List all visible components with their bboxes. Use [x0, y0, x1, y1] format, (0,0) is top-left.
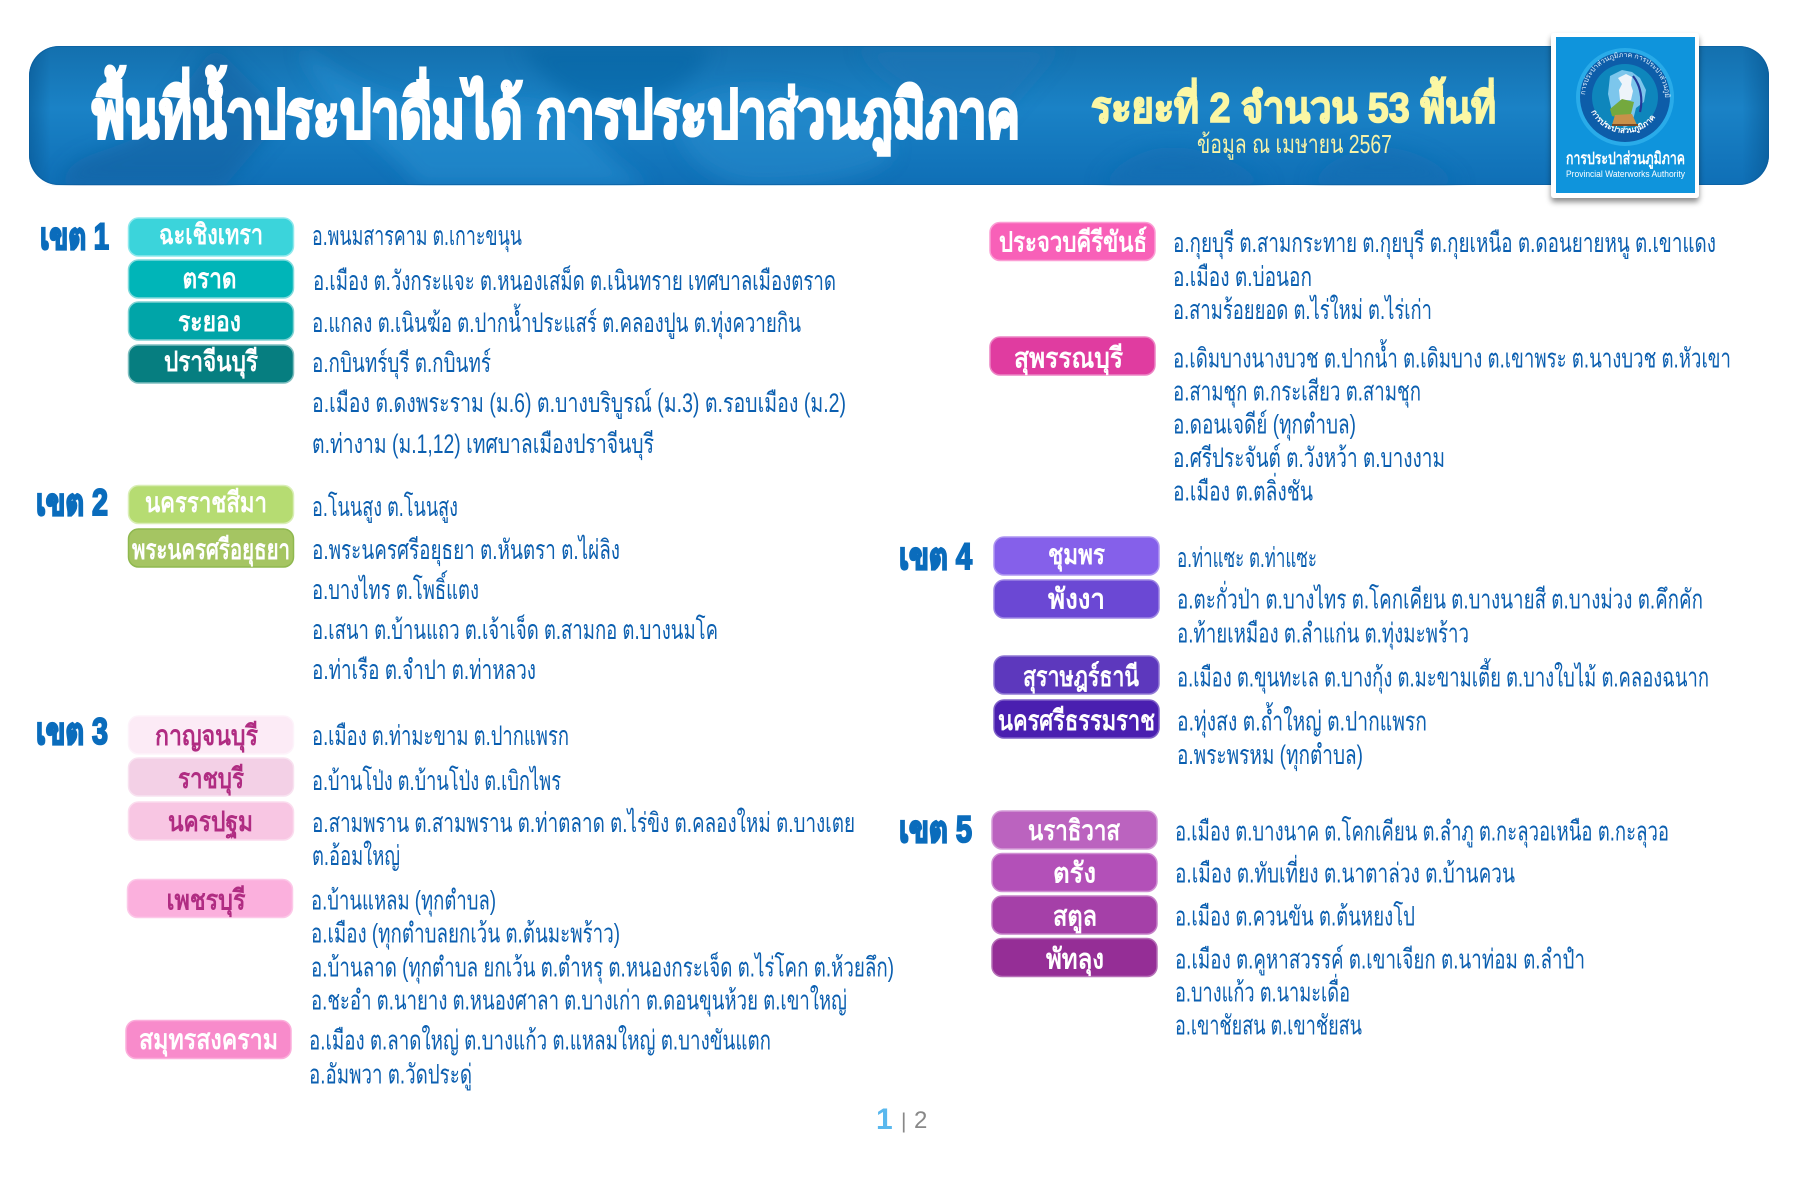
districts: Nakhon Pathom: [312, 807, 855, 871]
logo wordmark: การประปาส่วนภูมิภาค: [1566, 149, 1685, 170]
districts: Samut Songkhram: อ.เมือง ต.ลาดใหญ่ ต.บางแก้ว ต.แหลมใหญ่ ต.บางขันแตก: [309, 1024, 771, 1056]
districts: Suphan Buri: อ.ศรีประจันต์ ต.วังหว้า ต.บางงาม: [1173, 442, 1445, 473]
page number: 2: [914, 1107, 927, 1134]
province: Phatthalung: [992, 938, 1157, 976]
province: Phang Nga: [994, 580, 1159, 618]
province: Chumphon: [994, 537, 1159, 575]
province: Phetchaburi: [128, 880, 292, 918]
districts: Phetchaburi: [311, 886, 894, 1018]
districts: Phatthalung: อ.บางแก้ว ต.นามะเดื่อ: [1175, 974, 1350, 1008]
districts: Nakhon Pathom: อ.สามพราน ต.สามพราน ต.ท่าตลาด ต.ไร่ขิง ต.คลองใหม่ ต.บางเตย: [312, 807, 855, 838]
province: Phang Nga: พังงา: [1048, 584, 1105, 614]
districts: Phetchaburi: อ.เมือง (ทุกตำบลยกเว้น ต.ต้นมะพร้าว): [311, 918, 620, 950]
districts: Phatthalung: อ.เขาชัยสน ต.เขาชัยสน: [1175, 1010, 1362, 1040]
logo ring lettering: การประปาส่วนภูมิภาค: [1591, 110, 1656, 134]
heading: zone 2: เขต 2: [36, 482, 108, 523]
province: Samut Songkhram: [126, 1020, 291, 1058]
province: Chachoengsao: [128, 218, 294, 256]
districts: Phetchaburi: อ.บ้านแหลม (ทุกตำบล): [311, 886, 496, 918]
province: Ratchaburi: [128, 758, 294, 796]
districts: Suphan Buri: [1173, 338, 1731, 506]
districts: Prachinburi: [312, 347, 846, 461]
districts: Phatthalung: อ.เมือง ต.คูหาสวรรค์ ต.เขาเจียก ต.นาท่อม ต.ลำปำ: [1175, 944, 1585, 976]
panel: zone 2: [36, 482, 718, 685]
province: Satun: สตูล: [1053, 900, 1097, 934]
logo figure: [1608, 70, 1646, 128]
province: Nakhon Pathom: นครปฐม: [168, 806, 253, 840]
districts: Prachuap Khiri Khan: อ.สามร้อยยอด ต.ไร่ใหม่ ต.ไร่เก่า: [1173, 294, 1432, 325]
districts: Prachuap Khiri Khan: อ.เมือง ต.บ่อนอก: [1173, 262, 1312, 292]
panel: zone 5: [899, 809, 1669, 1040]
province: Satun: [992, 896, 1157, 934]
districts: Samut Songkhram: [309, 1024, 771, 1090]
districts: Ayutthaya: อ.พระนครศรีอยุธยา ต.หันตรา ต.ไผ่ลิง: [312, 535, 620, 567]
district: Kanchanaburi: อ.เมือง ต.ท่ามะขาม ต.ปากแพรก: [312, 721, 569, 751]
districts: Phang Nga: [1177, 580, 1703, 650]
districts: Ayutthaya: [312, 535, 718, 685]
district: Trang: อ.เมือง ต.ทับเที่ยง ต.นาตาล่วง ต.บ้านควน: [1175, 854, 1515, 888]
district: Satun: อ.เมือง ต.ควนขัน ต.ต้นหยงโป: [1175, 902, 1415, 932]
province: Prachinburi: [128, 345, 294, 383]
districts: Ayutthaya: อ.ท่าเรือ ต.จำปา ต.ท่าหลวง: [312, 655, 536, 685]
districts: Samut Songkhram: อ.อัมพวา ต.วัดประดู่: [309, 1060, 472, 1090]
panel: zone 4: [899, 536, 1709, 772]
district: Chumphon: อ.ท่าแซะ ต.ท่าแซะ: [1177, 543, 1317, 573]
districts: Phetchaburi: อ.ชะอำ ต.นายาง ต.หนองศาลา ต.บางเก่า ต.ดอนขุนห้วย ต.เขาใหญ่: [311, 984, 847, 1018]
province: Trang: ตรัง: [1053, 858, 1096, 888]
districts: Phang Nga: อ.ท้ายเหมือง ต.ลำแก่น ต.ทุ่งมะพร้าว: [1177, 618, 1469, 650]
province: Suphan Buri: [990, 337, 1155, 376]
province: Prachuap Khiri Khan: [990, 222, 1155, 260]
province: Nakhon Si Thammarat: [994, 700, 1159, 738]
panel: zone 1: [40, 216, 846, 461]
districts: Phetchaburi: อ.บ้านลาด (ทุกตำบล ยกเว้น ต.ตำหรุ ต.หนองกระเจ็ด ต.ไร่โคก ต.ห้วยลึก): [311, 950, 894, 984]
province: Phetchaburi: เพชรบุรี: [166, 884, 246, 918]
province: Ayutthaya: [128, 529, 294, 567]
province: Prachinburi: ปราจีนบุรี: [164, 346, 258, 379]
districts: Suphan Buri: อ.สามชุก ต.กระเสียว ต.สามชุก: [1173, 376, 1421, 408]
province: Trat: ตราด: [182, 263, 236, 294]
province: Rayong: [128, 302, 294, 340]
panel: Prachuap and Suphan: [990, 222, 1731, 506]
province: Rayong: ระยอง: [178, 306, 241, 337]
districts: Ayutthaya: อ.เสนา ต.บ้านแถว ต.เจ้าเจ็ด ต.สามกอ ต.บางนมโค: [312, 612, 718, 645]
heading: zone 4: เขต 4: [899, 536, 972, 577]
province: Nakhon Si Thammarat: นครศรีธรรมราช: [998, 705, 1155, 736]
districts: Prachinburi: อ.เมือง ต.ดงพระราม (ม.6) ต.บางบริบูรณ์ (ม.3) ต.รอบเมือง (ม.2): [312, 387, 846, 419]
province: Surat Thani: [994, 656, 1159, 694]
districts: Suphan Buri: อ.เมือง ต.ตลิ่งชัน: [1173, 472, 1313, 506]
province: Chachoengsao: ฉะเชิงเทรา: [159, 219, 263, 250]
province: Narathiwat: [992, 811, 1157, 849]
province: Surat Thani: สุราษฎร์ธานี: [1023, 661, 1139, 694]
panel: zone 3: [36, 711, 894, 1090]
province: Trang: [992, 854, 1157, 892]
districts: Phatthalung: [1175, 944, 1585, 1040]
subtitle: phase 2, 53 areas: ระยะที่ 2 จำนวน 53 พื้นที่: [1091, 76, 1496, 131]
page number: |: [901, 1110, 906, 1133]
districts: Nakhon Si Thammarat: [1177, 702, 1427, 772]
province: Kanchanaburi: [128, 716, 294, 754]
heading: zone 1: เขต 1: [40, 216, 109, 257]
province: Ayutthaya: พระนครศรีอยุธยา: [132, 534, 290, 567]
province: Nakhon Ratchasima: นครราชสีมา: [145, 487, 267, 518]
page number: 1: [876, 1103, 893, 1136]
province: Ratchaburi: ราชบุรี: [178, 763, 244, 796]
data date: ข้อมูล ณ เมษายน 2567: [1197, 129, 1392, 160]
province: Trat: [128, 260, 294, 298]
heading: zone 5: เขต 5: [899, 809, 972, 850]
districts: Prachuap Khiri Khan: [1173, 228, 1716, 325]
districts: Nakhon Pathom: ต.อ้อมใหญ่: [312, 840, 400, 871]
province: Nakhon Pathom: [128, 802, 294, 840]
province: Narathiwat: นราธิวาส: [1028, 815, 1121, 846]
province: Prachuap Khiri Khan: ประจวบคีรีขันธ์: [999, 226, 1147, 258]
province: Phatthalung: พัทลุง: [1046, 944, 1104, 976]
district: Rayong: อ.แกลง ต.เนินฆ้อ ต.ปากน้ำประแสร์ ต.คลองปูน ต.ทุ่งควายกิน: [312, 303, 801, 340]
districts: Suphan Buri: อ.ดอนเจดีย์ (ทุกตำบล): [1173, 408, 1356, 442]
province: Kanchanaburi: กาญจนบุรี: [155, 720, 258, 753]
page number: [876, 1103, 927, 1136]
district: Trat: อ.เมือง ต.วังกระแจะ ต.หนองเสม็ด ต.เนินทราย เทศบาลเมืองตราด: [313, 263, 836, 296]
logo card: [32, 34, 1703, 206]
districts: Ayutthaya: อ.บางไทร ต.โพธิ์แตง: [312, 570, 479, 605]
logo ring lettering: [1581, 50, 1671, 134]
title: พื้นที่น้ำประปาดื่มได้ การประปาส่วนภูมิภาค: [92, 65, 1020, 156]
districts: Nakhon Si Thammarat: อ.พระพรหม (ทุกตำบล): [1177, 740, 1363, 772]
province: Chumphon: ชุมพร: [1048, 539, 1105, 572]
districts: Nakhon Si Thammarat: อ.ทุ่งสง ต.ถ้ำใหญ่ ต.ปากแพรก: [1177, 702, 1427, 738]
district: Chachoengsao: อ.พนมสารคาม ต.เกาะขนุน: [312, 221, 522, 253]
province: Samut Songkhram: สมุทรสงคราม: [139, 1024, 278, 1057]
districts: Prachinburi: อ.กบินทร์บุรี ต.กบินทร์: [312, 347, 491, 380]
district: Nakhon Ratchasima: อ.โนนสูง ต.โนนสูง: [312, 492, 458, 523]
heading: zone 3: เขต 3: [36, 711, 108, 752]
province: Suphan Buri: สุพรรณบุรี: [1014, 342, 1123, 376]
logo english name: Provincial Waterworks Authority: [1566, 169, 1685, 180]
districts: Prachinburi: ต.ท่างาม (ม.1,12) เทศบาลเมืองปราจีนบุรี: [312, 429, 654, 461]
district: Ratchaburi: อ.บ้านโป่ง ต.บ้านโป่ง ต.เบิกไพร: [312, 766, 561, 796]
header banner: [29, 46, 1769, 186]
